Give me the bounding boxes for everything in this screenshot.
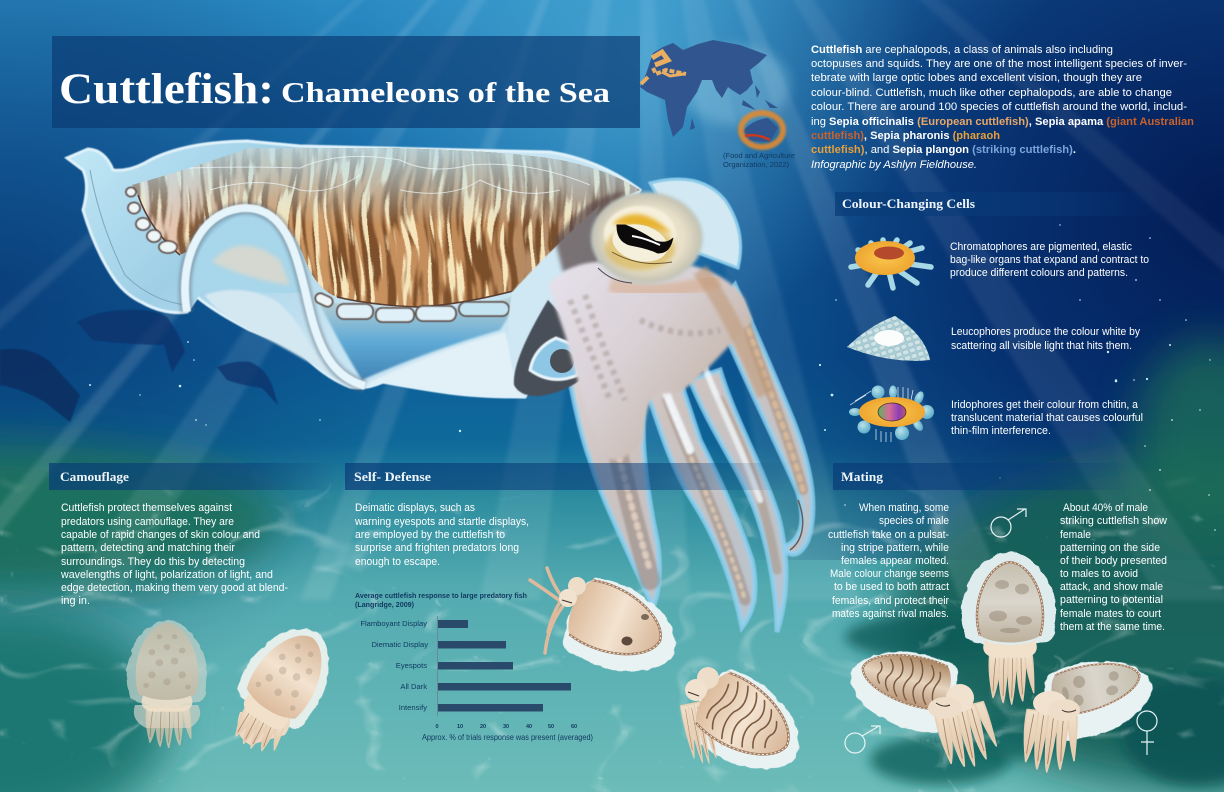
particles (89, 224, 1216, 531)
chart title (355, 591, 527, 609)
icon: male symbol, upper (991, 509, 1026, 537)
chart axis (436, 616, 438, 716)
body text: pattern, detecting and matching their (61, 542, 235, 554)
bar chart (355, 591, 593, 742)
body text: surroundings. They do this by detecting (61, 556, 245, 568)
tentacles (552, 285, 813, 632)
chart category labels: Flamboyant Display (360, 619, 427, 628)
body text: left column: mates against rival males. (832, 608, 949, 620)
heading bar (49, 463, 334, 490)
icon: leucophore (847, 316, 930, 361)
chart axis ticks: 40 (526, 724, 532, 730)
heading bar: Camouflage (60, 469, 129, 484)
icon: chromatophore (851, 240, 931, 288)
intro text block: tebrate with large optic lobes and excellent vision, though they are (811, 72, 1142, 84)
body text: left column (828, 502, 949, 620)
heading bar: Colour-Changing Cells (842, 196, 975, 211)
main cuttlefish illustration (60, 80, 813, 632)
chart category labels (360, 619, 428, 712)
chart category labels: Diematic Display (371, 640, 428, 649)
panel: colour-changing cells (835, 192, 1160, 442)
map source: (Food and Agriculture (723, 151, 795, 160)
chart axis ticks: 0 (435, 724, 439, 730)
chart axis ticks: 10 (457, 724, 463, 730)
text: leucophores: Leucophores produce the colour white by (951, 326, 1141, 338)
heading bar (833, 463, 1133, 490)
intro text block (811, 44, 1194, 171)
mating cuttlefish: female-patterned vertical (961, 552, 1057, 704)
body text: right column: to males to avoid (1060, 568, 1138, 580)
body text: capable of rapid changes of skin colour and (61, 529, 260, 541)
title banner (52, 36, 640, 128)
text: leucophores (951, 326, 1141, 352)
body text: right column: About 40% of male (1063, 502, 1148, 514)
text: chromatophores: bag-like organs that expand and contract to (950, 254, 1149, 266)
body text: right column: female mates to court (1060, 608, 1161, 620)
panel: self-defense (345, 463, 818, 792)
body text (354, 502, 529, 568)
chart category labels: All Dark (400, 682, 427, 691)
body text: left column: species of male (879, 515, 949, 527)
title: Cuttlefish: (59, 66, 274, 113)
striped cuttlefish (679, 661, 818, 792)
intro text block: cuttlefish), Sepia pharonis (pharaoh (811, 130, 1000, 142)
body text: edge detection, making them very good at blend- (61, 582, 288, 594)
mantle bead rows (126, 188, 509, 322)
map source (723, 151, 795, 169)
chart title: (Langridge, 2009) (355, 600, 414, 609)
text: iridophores: Iridophores get their colour from chitin, a (951, 399, 1138, 411)
chart category labels: Intensify (399, 703, 427, 712)
camouflaged cuttlefish: grey (127, 620, 207, 748)
body text: right column: female (1060, 529, 1091, 541)
text: chromatophores: produce different colours and patterns. (950, 267, 1128, 279)
chart axis ticks (435, 724, 577, 730)
body text (60, 502, 288, 607)
heading bar (345, 463, 790, 490)
map glow (680, 45, 790, 125)
panel: mating (828, 463, 1167, 775)
head (548, 262, 752, 460)
head fold band (508, 205, 600, 397)
intro text block: cuttlefish) , and Sepia plangon (striking cuttlefish) . (811, 144, 1076, 156)
rear fin lobe behind the head (650, 179, 741, 268)
body text: Cuttlefish protect themselves against (61, 502, 232, 514)
body text: left column: females, and protect their (832, 595, 949, 607)
body text: right column (1060, 502, 1167, 633)
chart axis ticks: 50 (548, 724, 554, 730)
species range highlight (641, 52, 783, 147)
body text: left column: ing stripe pattern, while (841, 542, 949, 554)
body text: wavelengths of light, polarization of light, and (60, 569, 273, 581)
intro text block: Infographic by Ashlyn Fieldhouse. (811, 159, 977, 171)
funnel (514, 300, 580, 396)
body text: enough to escape. (355, 556, 440, 568)
startled cuttlefish with eyespots (530, 568, 690, 692)
body text: right column: of their body presented (1060, 555, 1167, 567)
intro text block: colour-blind. Cuttlefish, much like other cephalopods, are able to change (811, 87, 1172, 99)
body text: left column: When mating, some (859, 502, 949, 514)
body text: right column: patterning on the side (1060, 542, 1160, 554)
chart bars (438, 620, 571, 712)
body text: right column: attack, and show male (1060, 581, 1163, 593)
text: chromatophores: Chromatophores are pigmented, elastic (950, 241, 1133, 253)
body text: Deimatic displays, such as (355, 502, 475, 514)
text: chromatophores (950, 241, 1149, 279)
subtitle: Chameleons of the Sea (281, 77, 611, 109)
body text: predators using camouflage. They are (61, 516, 234, 528)
silhouettes of distant cuttlefish (0, 310, 278, 422)
chart title: Average cuttlefish response to large predatory fish (355, 591, 527, 600)
heading bar: Self- Defense (354, 469, 431, 484)
mating cuttlefish: striped male (842, 637, 1000, 772)
heading bar (835, 192, 1160, 216)
body text: left column: Male colour change seems (830, 568, 949, 580)
body text: left column: to be used to both attract (834, 581, 949, 593)
fold of the fin (185, 208, 365, 386)
body text: right column: patterning to potential (1060, 594, 1163, 606)
text: iridophores: thin-film interference. (951, 425, 1051, 437)
camouflaged cuttlefish: peach (229, 611, 350, 758)
map source: Organization, 2022) (723, 160, 790, 169)
text: iridophores (951, 399, 1143, 437)
panel: camouflage (49, 463, 350, 758)
body text: are employed by the cuttlefish to (355, 529, 505, 541)
mating cuttlefish: mottled female (1020, 648, 1160, 775)
body text: ing in. (61, 595, 90, 607)
mantle with tiger stripes (132, 148, 640, 308)
intro text block: ing Sepia officinalis (European cuttlefish) , Sepia apama (giant Australian (811, 116, 1194, 128)
icon: female symbol (1137, 711, 1157, 755)
map land masses (640, 40, 778, 142)
chart category labels: Eyespots (396, 661, 427, 670)
intro text block: octopuses and squids. They are one of the most intelligent species of inver- (811, 58, 1187, 70)
chart axis ticks: 30 (503, 724, 509, 730)
text: iridophores: translucent material that causes colourful (951, 412, 1143, 424)
body text: right column: striking cuttlefish show (1060, 515, 1167, 527)
world distribution map (640, 40, 795, 169)
body text: left column: females appear molted. (841, 555, 949, 567)
intro text block: colour. There are around 100 species of cuttlefish around the world, includ- (811, 101, 1187, 113)
chart axis title: Approx. % of trials response was present (averaged) (422, 733, 593, 742)
chart axis ticks: 20 (480, 724, 486, 730)
fin and outer body (67, 141, 640, 397)
icon: male symbol, lower (845, 726, 880, 753)
icon: iridophore (849, 386, 934, 442)
heading bar: Mating (841, 469, 884, 484)
chart axis ticks: 60 (571, 724, 577, 730)
body text: surprise and frighten predators long (355, 542, 519, 554)
body text: right column: them at the same time. (1060, 621, 1165, 633)
lower belly (318, 295, 525, 397)
body text: warning eyespots and startle displays, (354, 516, 529, 528)
eye (591, 192, 703, 284)
text: leucophores: scattering all visible light that hits them. (951, 340, 1132, 352)
body text: left column: cuttlefish take on a pulsat- (828, 529, 949, 541)
intro text block: Cuttlefish are cephalopods, a class of animals also including (811, 44, 1113, 56)
